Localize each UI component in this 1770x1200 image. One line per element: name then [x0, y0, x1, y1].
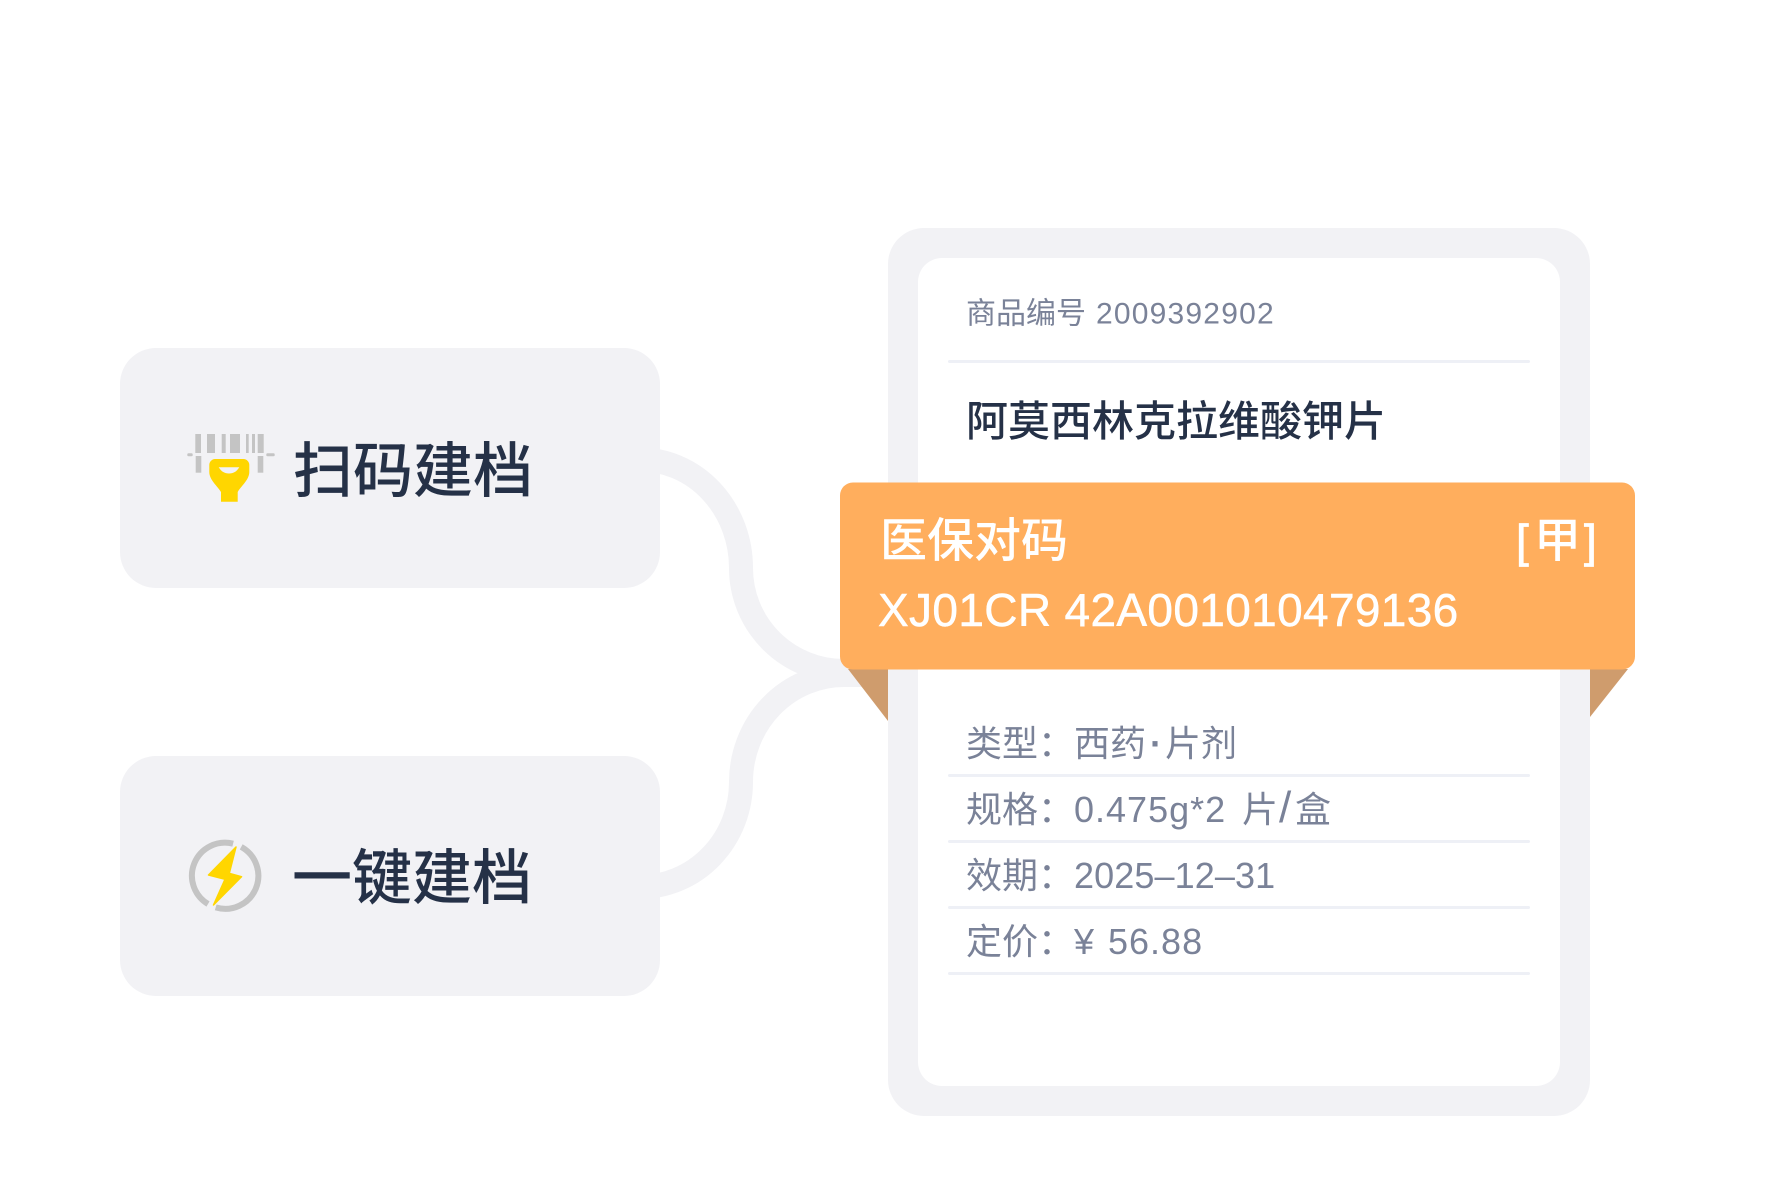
label: one-click create record: 一键建档 — [292, 845, 532, 912]
heading: medical insurance code: 医保对码 — [880, 514, 1068, 567]
row: expiry date: 2025–12–31 — [1074, 855, 1275, 896]
ribbon fold: right — [1590, 669, 1628, 717]
tag: class A: [ — [1516, 515, 1529, 567]
row: list price — [948, 921, 1530, 975]
text: drug name: 阿莫西林克拉维酸钾片 — [966, 398, 1386, 445]
tag: class A: ] — [1584, 515, 1597, 567]
row: list price: 定价： — [966, 921, 1074, 962]
row: type — [948, 723, 1530, 777]
ribbon fold: left — [848, 669, 888, 721]
icon: barcode scanner — [187, 434, 275, 502]
row: type: 片剂 — [1165, 723, 1237, 764]
row: specification: 规格： — [966, 789, 1074, 830]
panel: product record card — [888, 228, 1590, 1116]
panel: scan to create record — [120, 348, 660, 588]
row: specification: 0.475g*2 — [1074, 789, 1226, 830]
icon: lightning in ring — [192, 843, 258, 909]
row: type: 类型： — [966, 723, 1074, 764]
banner: medical insurance code — [840, 482, 1635, 670]
row: specification — [948, 783, 1530, 843]
row: specification: 片 — [1242, 789, 1278, 830]
row: type: 西药 — [1074, 723, 1146, 764]
row: type: · — [1150, 723, 1162, 764]
row: expiry date — [948, 855, 1530, 909]
row: expiry date: 效期： — [966, 855, 1074, 896]
connector: scan card to medical code banner — [640, 460, 880, 671]
row: list price: 56.88 — [1108, 921, 1203, 962]
text: code number: XJ01CR 42A001010479136 — [878, 584, 1459, 636]
row: list price: ¥ — [1073, 921, 1095, 962]
row: specification: / — [1279, 783, 1292, 832]
tag: class A — [1516, 514, 1597, 567]
row: specification: 盒 — [1295, 789, 1331, 830]
panel: one-click create record — [120, 756, 660, 996]
text: product number: 2009392902 — [1096, 298, 1275, 330]
connector: one-click card to medical code banner — [640, 675, 880, 887]
tag: class A: 甲 — [1534, 514, 1581, 567]
label: scan to create record: 扫码建档 — [293, 438, 533, 505]
text: product number: 商品编号 — [966, 298, 1086, 330]
